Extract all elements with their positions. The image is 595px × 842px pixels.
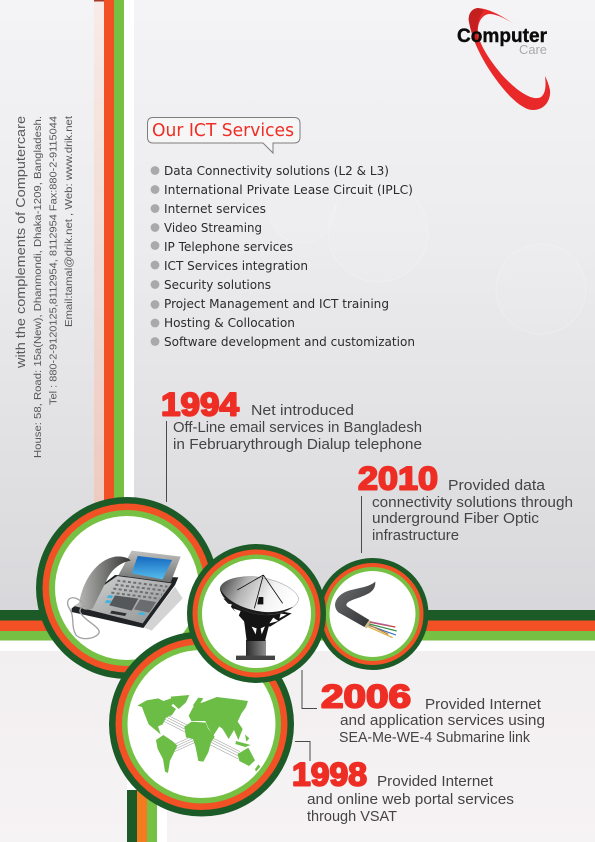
circle: satellite dish bbox=[187, 544, 326, 683]
circle: telephone bbox=[36, 497, 218, 679]
connector lines bbox=[166, 421, 362, 761]
heading: Our ICT Services bubble bbox=[148, 118, 300, 153]
circle: cable bbox=[316, 558, 428, 670]
icon: world map with cables bbox=[137, 695, 260, 773]
services list bbox=[151, 164, 415, 349]
heading: Our ICT Services bubble: Our ICT Services bbox=[152, 121, 294, 141]
sidebar contact text: Email:tamal@drik.net , Web: www.drik.net bbox=[64, 116, 75, 327]
icon: desk telephone bbox=[68, 551, 183, 639]
timeline: 2010 bbox=[358, 460, 573, 544]
circle: world map bbox=[109, 632, 294, 816]
timeline: 2006: Provided Internet bbox=[425, 697, 541, 713]
icon: fiber optic cable bbox=[335, 582, 397, 638]
timeline: 2010: infrastructure bbox=[372, 528, 459, 544]
timeline: 2006: SEA-Me-WE-4 Submarine link bbox=[339, 730, 531, 746]
timeline: 1998: and online web portal services bbox=[307, 792, 514, 808]
sidebar contact text: House: 58, Road: 15a(New), Dhanmondi, Dhaka-1209, Bangladesh. bbox=[32, 116, 44, 458]
timeline: 2010: Provided data bbox=[448, 478, 546, 494]
services list: Internet services bbox=[164, 202, 266, 216]
services list: Project Management and ICT training bbox=[164, 297, 389, 311]
logo: Computer Care: Care bbox=[519, 42, 547, 57]
timeline: 1994: in Februarythrough Dialup telephone bbox=[173, 437, 422, 453]
services list: Video Streaming bbox=[164, 221, 262, 235]
timeline: 2006: and application services using bbox=[340, 713, 545, 729]
services list: ICT Services integration bbox=[164, 259, 308, 273]
icon: satellite dish bbox=[220, 575, 299, 660]
sidebar contact text: with the complements of Computercare bbox=[13, 116, 28, 369]
sidebar contact text: Tel : 880-2-9120125,8112954, 8112954 Fax:880-2-9115044 bbox=[48, 116, 60, 405]
vertical stripes top bbox=[94, 0, 124, 610]
vertical stripes bottom bbox=[127, 790, 157, 842]
timeline: 2006: 2006 bbox=[321, 678, 411, 714]
sidebar contact text bbox=[13, 116, 75, 458]
services list: Data Connectivity solutions (L2 & L3) bbox=[164, 164, 389, 178]
services list: Hosting & Collocation bbox=[164, 316, 295, 330]
timeline: 2006 bbox=[321, 678, 545, 746]
services list: International Private Lease Circuit (IPLC) bbox=[164, 183, 413, 197]
timeline: 1998: through VSAT bbox=[307, 809, 397, 825]
logo: Computer Care bbox=[457, 8, 550, 110]
timeline: 1994: 1994 bbox=[161, 386, 239, 422]
services list: IP Telephone services bbox=[164, 240, 293, 254]
horizontal stripes bbox=[0, 610, 595, 640]
logo: Computer Care: Computer bbox=[457, 25, 547, 47]
timeline: 2010: underground Fiber Optic bbox=[372, 511, 539, 527]
timeline: 1994: Off-Line email services in Bangladesh bbox=[173, 420, 422, 436]
services list: Security solutions bbox=[164, 278, 271, 292]
timeline: 1994 bbox=[161, 386, 422, 453]
timeline: 1994: Net introduced bbox=[251, 403, 354, 419]
services list: Software development and customization bbox=[164, 335, 415, 349]
timeline: 1998 bbox=[292, 756, 514, 825]
timeline: 2010: connectivity solutions through bbox=[372, 495, 573, 511]
timeline: 2010: 2010 bbox=[358, 460, 438, 496]
timeline: 1998: Provided Internet bbox=[377, 774, 493, 790]
timeline: 1998: 1998 bbox=[292, 756, 367, 792]
